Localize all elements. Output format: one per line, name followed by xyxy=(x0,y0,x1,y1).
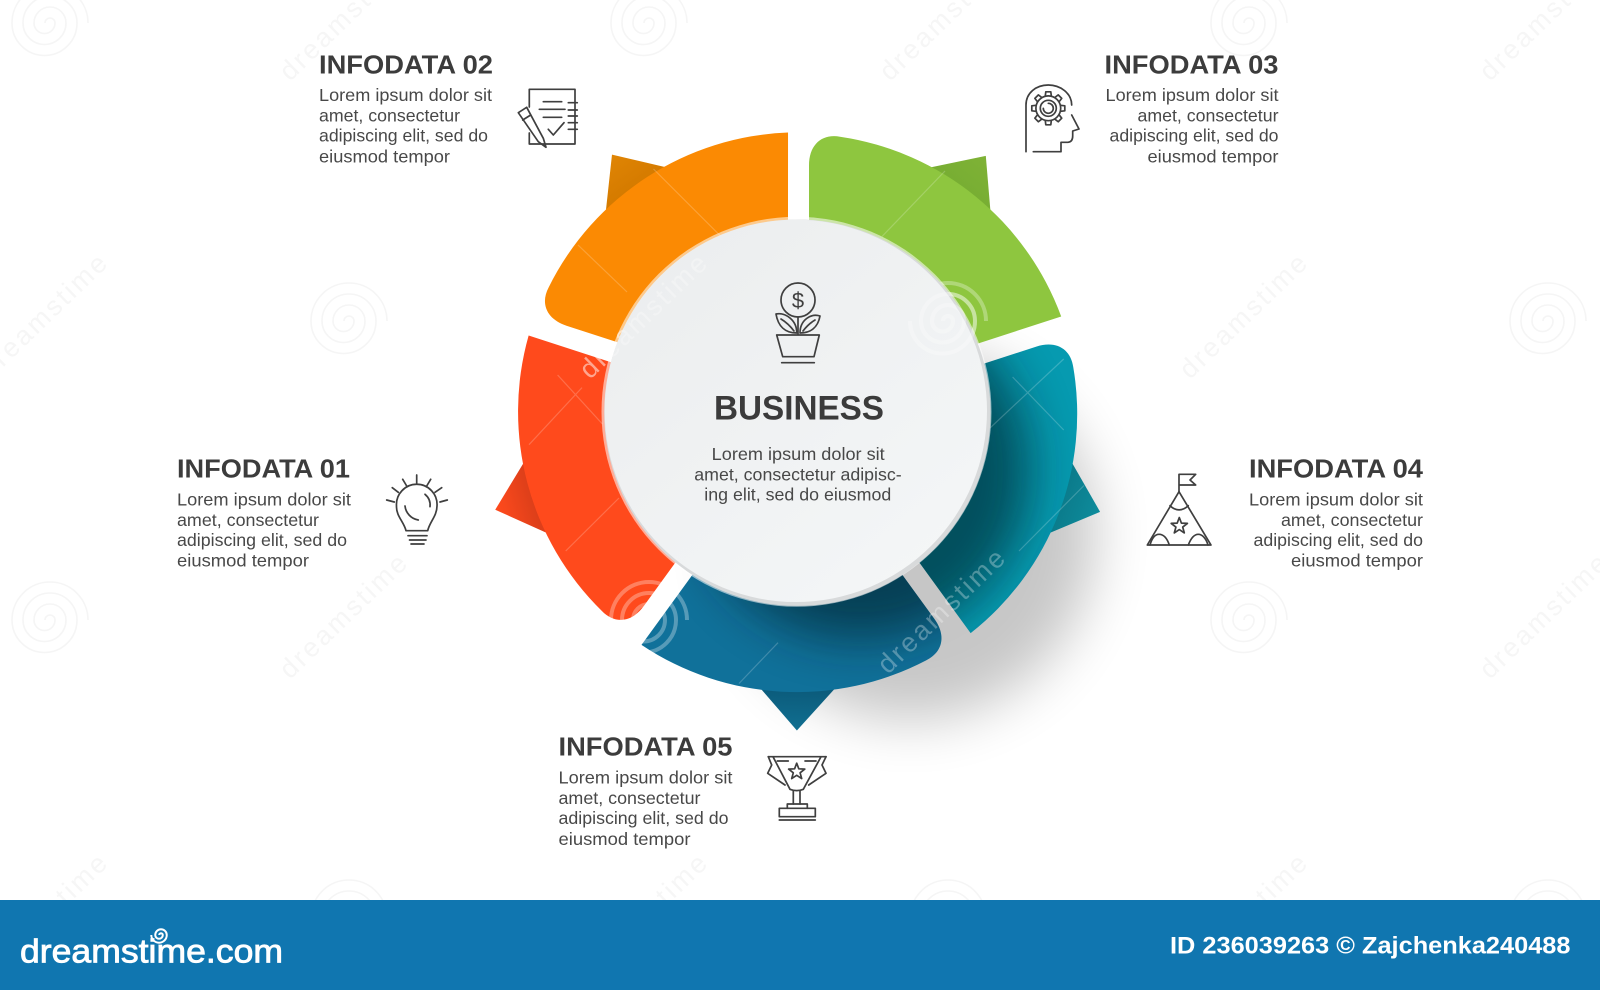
text block: infodata 01: INFODATA 01 xyxy=(177,454,350,484)
text block: business description: ing elit, sed do eiusmod xyxy=(704,485,891,505)
text block: business description xyxy=(694,444,902,505)
watermark over the ring xyxy=(529,169,1084,684)
text block: infodata 02: INFODATA 02 xyxy=(319,49,493,79)
text block: business description: Lorem ipsum dolor sit xyxy=(712,444,885,464)
central watermark on the circle: dreamstime xyxy=(573,248,713,384)
circle shadow cast on teal and blue segments xyxy=(690,300,1030,640)
footer bar xyxy=(0,900,1600,990)
text block: infodata 05: eiusmod tempor xyxy=(558,829,691,849)
text block: infodata 03: eiusmod tempor xyxy=(1148,146,1279,166)
text block: infodata 03: adipiscing elit, sed do xyxy=(1110,126,1278,146)
background watermark: dreamstime xyxy=(573,848,713,984)
text block: infodata 05: INFODATA 05 xyxy=(558,732,732,762)
segment: infodata 04 teal xyxy=(855,338,1142,646)
text block: infodata 04: Lorem ipsum dolor sit xyxy=(1249,489,1423,509)
text block: infodata 04: adipiscing elit, sed do xyxy=(1254,530,1423,550)
soft drop shadow under the ring xyxy=(725,350,1095,720)
text block: infodata 03 xyxy=(1104,49,1279,166)
footer logo: dreamstime.com: dreamstime.com xyxy=(20,932,283,970)
text block: infodata 01: Lorem ipsum dolor sit xyxy=(177,489,351,509)
central circle xyxy=(602,217,992,607)
text block: infodata 02 xyxy=(319,49,493,166)
icon: money plant: $ xyxy=(792,288,804,313)
text block: infodata 03: INFODATA 03 xyxy=(1104,49,1278,79)
footer credit: ID 236039263 © Zajchenka240488 xyxy=(1170,932,1570,959)
icon: head with gear xyxy=(1026,85,1079,152)
text block: infodata 02: eiusmod tempor xyxy=(319,146,450,166)
icon: money plant xyxy=(776,283,820,363)
text block: infodata 05 xyxy=(558,732,733,849)
text block: infodata 05: adipiscing elit, sed do xyxy=(558,808,728,828)
text block: infodata 03: Lorem ipsum dolor sit xyxy=(1106,85,1279,105)
text block: infodata 03: amet, consectetur xyxy=(1138,106,1279,126)
watermark over the ring: dreamstime xyxy=(871,543,1011,679)
segment: infodata 02 orange xyxy=(539,77,826,385)
text block: infodata 01: eiusmod tempor xyxy=(177,551,309,571)
text block: infodata 04 xyxy=(1249,454,1424,571)
heading: business: BUSINESS xyxy=(714,390,884,428)
icon: mountain with flag xyxy=(1147,474,1211,545)
segment: infodata 03 green xyxy=(809,136,1061,357)
background watermark: dreamstime xyxy=(273,548,413,684)
text block: infodata 04: eiusmod tempor xyxy=(1291,551,1423,571)
watermark over the ring: dreamstime xyxy=(573,248,713,384)
text block: infodata 01 xyxy=(177,454,351,571)
background watermark: dreamstime xyxy=(1173,248,1313,384)
segment: infodata 05 blue xyxy=(618,464,952,791)
text block: infodata 02: adipiscing elit, sed do xyxy=(319,126,488,146)
text block: infodata 04: INFODATA 04 xyxy=(1249,454,1424,484)
text block: business description: amet, consectetur adipisc- xyxy=(694,464,902,484)
central watermark on the circle xyxy=(573,248,975,384)
text block: infodata 02: amet, consectetur xyxy=(319,106,460,126)
background watermark: dreamstime xyxy=(1173,848,1313,984)
text block: infodata 02: Lorem ipsum dolor sit xyxy=(319,85,492,105)
text block: infodata 04: amet, consectetur xyxy=(1281,510,1423,530)
text block: infodata 05: Lorem ipsum dolor sit xyxy=(558,767,733,787)
icon: trophy xyxy=(768,757,826,820)
text block: infodata 01: amet, consectetur xyxy=(177,510,319,530)
text block: infodata 01: adipiscing elit, sed do xyxy=(177,530,347,550)
segment: infodata 01 red xyxy=(423,303,756,630)
icon: notepad and pen xyxy=(518,89,577,147)
icon: light bulb xyxy=(387,475,447,544)
text block: infodata 05: amet, consectetur xyxy=(558,788,701,808)
